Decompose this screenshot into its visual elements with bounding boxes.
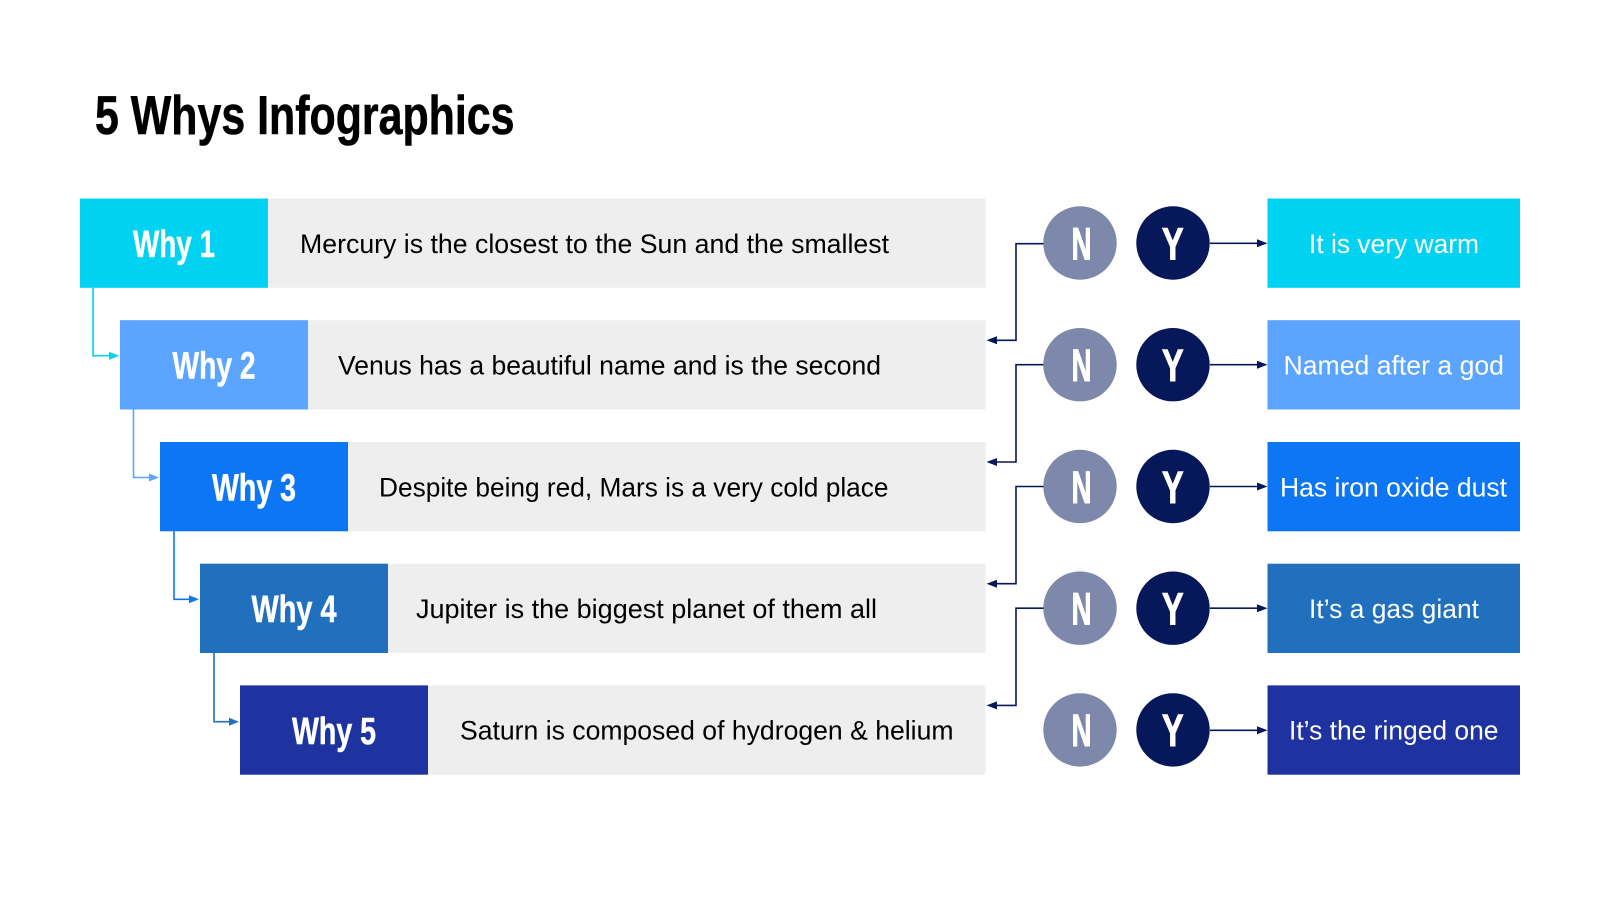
arrow: no 3 back to why 4 xyxy=(986,486,1044,588)
arrow: why 4 to why 5 xyxy=(214,653,239,726)
row: why 3 xyxy=(160,442,1520,531)
N circle 1: N xyxy=(1072,218,1092,269)
N circle 3 xyxy=(1043,450,1117,523)
result box 1: It is very warm xyxy=(1309,229,1479,259)
Y circle 5 xyxy=(1136,693,1210,767)
why 3 box: Why 3 xyxy=(212,468,296,510)
why 1 box xyxy=(80,198,268,288)
description panel 3: Despite being red, Mars is a very cold place xyxy=(379,472,888,502)
arrow: no 1 back to why 2 xyxy=(986,244,1044,344)
N circle 3: N xyxy=(1072,462,1092,513)
result box 1 xyxy=(1268,198,1520,288)
description panel 5: Saturn is composed of hydrogen & helium xyxy=(460,716,954,746)
why 2 box xyxy=(120,320,308,410)
title: 5 Whys Infographics xyxy=(95,84,514,146)
Y circle 2: Y xyxy=(1162,340,1184,391)
arrow: why 1 to why 2 xyxy=(93,288,119,360)
arrow: yes 3 xyxy=(1210,482,1268,490)
arrow: yes 4 xyxy=(1210,604,1268,612)
row: why 1 xyxy=(80,198,1520,288)
N circle 4: N xyxy=(1072,584,1092,634)
description panel 1 xyxy=(80,198,986,288)
result box 5: It’s the ringed one xyxy=(1289,716,1498,746)
why 5 box xyxy=(240,685,428,775)
Y circle 1: Y xyxy=(1162,218,1184,269)
Y circle 4: Y xyxy=(1162,584,1184,634)
row: why 5 xyxy=(240,685,1520,775)
result box 5 xyxy=(1268,685,1520,775)
row: why 4 xyxy=(200,564,1520,653)
result box 4: It’s a gas giant xyxy=(1309,594,1480,624)
N circle 1 xyxy=(1043,206,1117,280)
why 4 box: Why 4 xyxy=(252,589,336,631)
result box 4 xyxy=(1268,564,1520,653)
why 4 box xyxy=(200,564,388,653)
why 2 box: Why 2 xyxy=(172,346,256,388)
description panel 2 xyxy=(120,320,986,410)
arrow: why 3 to why 4 xyxy=(174,531,199,603)
description panel 4: Jupiter is the biggest planet of them all xyxy=(416,594,877,624)
result box 3 xyxy=(1268,442,1520,531)
Y circle 1 xyxy=(1136,206,1210,280)
why 5 box: Why 5 xyxy=(292,711,376,753)
N circle 5: N xyxy=(1072,705,1092,756)
result box 2: Named after a god xyxy=(1284,350,1504,380)
result box 2 xyxy=(1268,320,1520,410)
Y circle 3 xyxy=(1136,450,1210,523)
Y circle 2 xyxy=(1136,328,1210,401)
N circle 4 xyxy=(1043,572,1117,645)
description panel 4 xyxy=(200,564,986,653)
description panel 1: Mercury is the closest to the Sun and the smallest xyxy=(300,229,890,259)
arrow: yes 5 xyxy=(1210,726,1268,734)
N circle 2 xyxy=(1043,328,1117,401)
N circle 2: N xyxy=(1072,340,1092,391)
why 1 box: Why 1 xyxy=(133,224,215,266)
description panel 5 xyxy=(240,685,986,775)
arrow: yes 1 xyxy=(1210,239,1268,247)
row: why 2 xyxy=(120,320,1520,410)
arrow: yes 2 xyxy=(1210,361,1268,369)
description panel 3 xyxy=(160,442,986,531)
N circle 5 xyxy=(1043,693,1117,767)
Y circle 4 xyxy=(1136,572,1210,645)
Y circle 3: Y xyxy=(1162,462,1184,513)
result box 3: Has iron oxide dust xyxy=(1280,472,1508,502)
Y circle 5: Y xyxy=(1162,705,1184,756)
description panel 2: Venus has a beautiful name and is the second xyxy=(338,350,881,380)
why 3 box xyxy=(160,442,348,531)
arrow: why 2 to why 3 xyxy=(134,410,159,482)
arrow: no 4 back to why 5 xyxy=(986,608,1044,709)
arrow: no 2 back to why 3 xyxy=(986,365,1044,466)
